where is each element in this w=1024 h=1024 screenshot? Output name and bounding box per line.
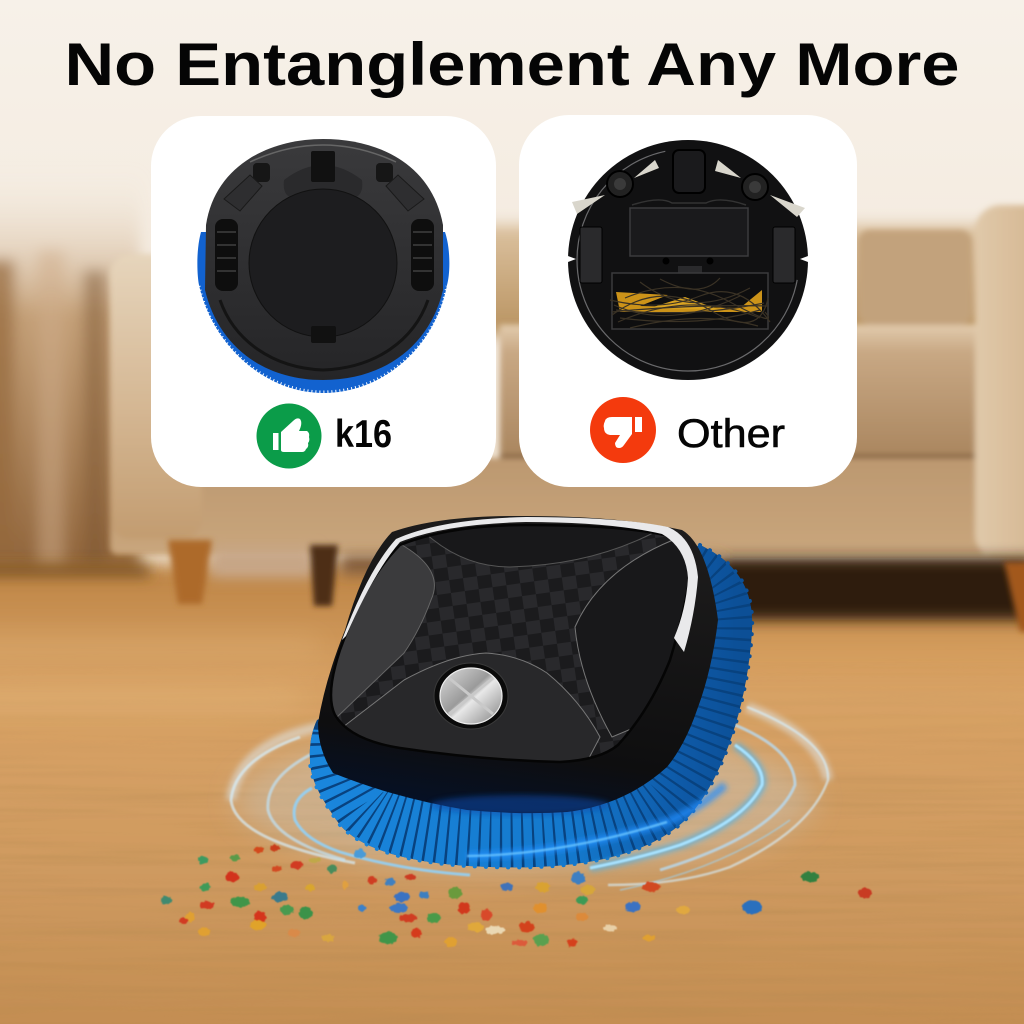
motion rings in front of robot xyxy=(294,745,790,890)
label: other: Other xyxy=(677,412,785,456)
title: No Entanglement Any More xyxy=(64,31,959,98)
main robot with blue mop xyxy=(310,515,752,867)
panel: other comparison card xyxy=(519,115,857,487)
colorful debris crumbs xyxy=(160,845,872,947)
robot underside: k16 xyxy=(197,139,449,393)
metal power button xyxy=(434,663,508,729)
robot underside: other, hair tangled xyxy=(568,140,808,380)
robot body shell xyxy=(318,516,718,813)
motion rings behind robot xyxy=(231,707,828,885)
silver trim xyxy=(342,517,698,652)
blue mop ring xyxy=(310,545,752,867)
label: k16: k16 xyxy=(335,413,392,456)
icon: red thumbs down xyxy=(590,397,656,463)
panel: k16 comparison card xyxy=(151,116,496,487)
top face panels xyxy=(332,534,672,761)
icon: green thumbs up xyxy=(256,404,322,468)
blue underglow xyxy=(430,795,610,815)
